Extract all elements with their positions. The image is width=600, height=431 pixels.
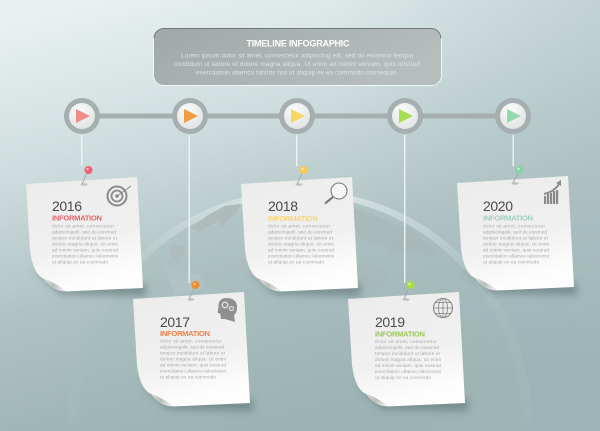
pin xyxy=(512,166,524,185)
information: INFORMATION xyxy=(483,214,533,222)
body: ut aliquip ex ea commodo xyxy=(375,375,431,380)
icon: globe xyxy=(434,298,452,318)
body: dolor sit amet, consectetur xyxy=(268,224,330,228)
note 2020 xyxy=(457,166,577,295)
panel text: Lorem ipsum dolor sit amet, consectetur adipiscing elit, sed do eiusmod tempor xyxy=(181,52,415,60)
year: 2018 xyxy=(268,198,298,214)
year: 2017 xyxy=(160,314,190,330)
information: INFORMATION xyxy=(268,214,318,223)
body: dolore magna aliqua. Ut enim xyxy=(375,357,441,362)
body: adipiscingelit, sed do eiusmod xyxy=(268,230,332,234)
body xyxy=(52,224,118,264)
globe backdrop xyxy=(68,190,532,431)
body: exercitation ullamco laborisnisi xyxy=(268,254,334,258)
timeline node 2018 xyxy=(279,98,315,134)
body: dolore magna aliqua. Ut enim xyxy=(483,242,549,246)
body: dolore magna aliqua. Ut enim xyxy=(268,242,334,246)
year: 2020 xyxy=(483,198,513,214)
information: INFORMATION xyxy=(52,214,102,222)
body: adipiscingelit, sed do eiusmod xyxy=(52,230,116,234)
body: adipiscingelit, sed do eiusmod xyxy=(160,344,224,350)
timeline node 2017 xyxy=(172,98,208,134)
pin xyxy=(402,281,414,301)
body: tempor incididunt ut labore et xyxy=(268,236,334,240)
body: ad minim veniam, quis nostrud xyxy=(268,248,334,252)
timeline node 2020 xyxy=(495,98,531,134)
body: ut aliquip ex ea commodo xyxy=(160,374,216,380)
body: tempor incididunt ut labore et xyxy=(52,236,118,240)
timeline bar xyxy=(82,114,513,118)
note 2016 xyxy=(26,166,146,296)
body: dolore magna aliqua. Ut enim xyxy=(52,242,118,246)
panel text: incididunt ut labore et dolore magna aliqua. Ut enim ad minim veniam, quis nostrud xyxy=(174,61,420,68)
body: dolore magna aliqua. Ut enim xyxy=(160,356,226,362)
panel title: TIMELINE INFOGRAPHIC xyxy=(246,38,350,48)
body: ad minim veniam, quis nostrud xyxy=(52,248,118,252)
note 2018 xyxy=(241,166,361,296)
body: adipiscingelit, sed do eiusmod xyxy=(483,230,547,234)
body: tempor incididunt ut labore et xyxy=(375,351,441,356)
body xyxy=(375,339,441,380)
note 2019 xyxy=(348,281,468,411)
icon: target xyxy=(108,186,131,206)
body: exercitation ullamco laborisnisi xyxy=(375,369,441,374)
body: adipiscingelit, sed do eiusmod xyxy=(375,345,439,350)
body: ad minim veniam, quis nostrud xyxy=(160,362,226,368)
body: dolor sit amet, consectetur xyxy=(375,339,437,344)
connector lines xyxy=(81,135,514,283)
body: tempor incididunt ut labore et xyxy=(483,236,549,240)
header panel xyxy=(154,28,442,85)
body: ut aliquip ex ea commodo xyxy=(268,260,324,264)
icon: head with gears xyxy=(218,298,237,322)
note 2017 xyxy=(133,281,253,411)
pin xyxy=(296,166,308,186)
body xyxy=(160,338,226,380)
body: tempor incididunt ut labore et xyxy=(160,350,226,356)
pin xyxy=(188,281,200,301)
body: dolor sit amet, consectetur xyxy=(52,224,114,228)
body xyxy=(483,224,549,264)
year: 2019 xyxy=(375,314,405,330)
body: ad minim veniam, quis nostrud xyxy=(375,363,441,368)
body: ut aliquip ex ea commodo xyxy=(483,260,539,264)
panel text: exercitation ullamco laboris nisi ut aliquip ex ea commodo consequat. xyxy=(196,70,398,76)
panel text xyxy=(174,52,420,76)
body: ad minim veniam, quis nostrud xyxy=(483,248,549,252)
body: exercitation ullamco laborisnisi xyxy=(483,254,549,258)
year: 2016 xyxy=(52,198,82,214)
body: exercitation ullamco laborisnisi xyxy=(52,254,118,258)
icon: magnifier xyxy=(325,183,347,204)
body: dolor sit amet, consectetur xyxy=(160,338,222,344)
body xyxy=(268,224,334,264)
body: exercitation ullamco laborisnisi xyxy=(160,368,226,374)
information: INFORMATION xyxy=(160,329,210,338)
timeline node 2019 xyxy=(387,98,423,134)
information: INFORMATION xyxy=(375,330,425,338)
body: dolor sit amet, consectetur xyxy=(483,224,545,228)
body: ut aliquip ex ea commodo xyxy=(52,260,108,264)
timeline node 2016 xyxy=(64,98,100,134)
pin xyxy=(80,166,92,186)
icon: bar chart xyxy=(544,180,561,204)
